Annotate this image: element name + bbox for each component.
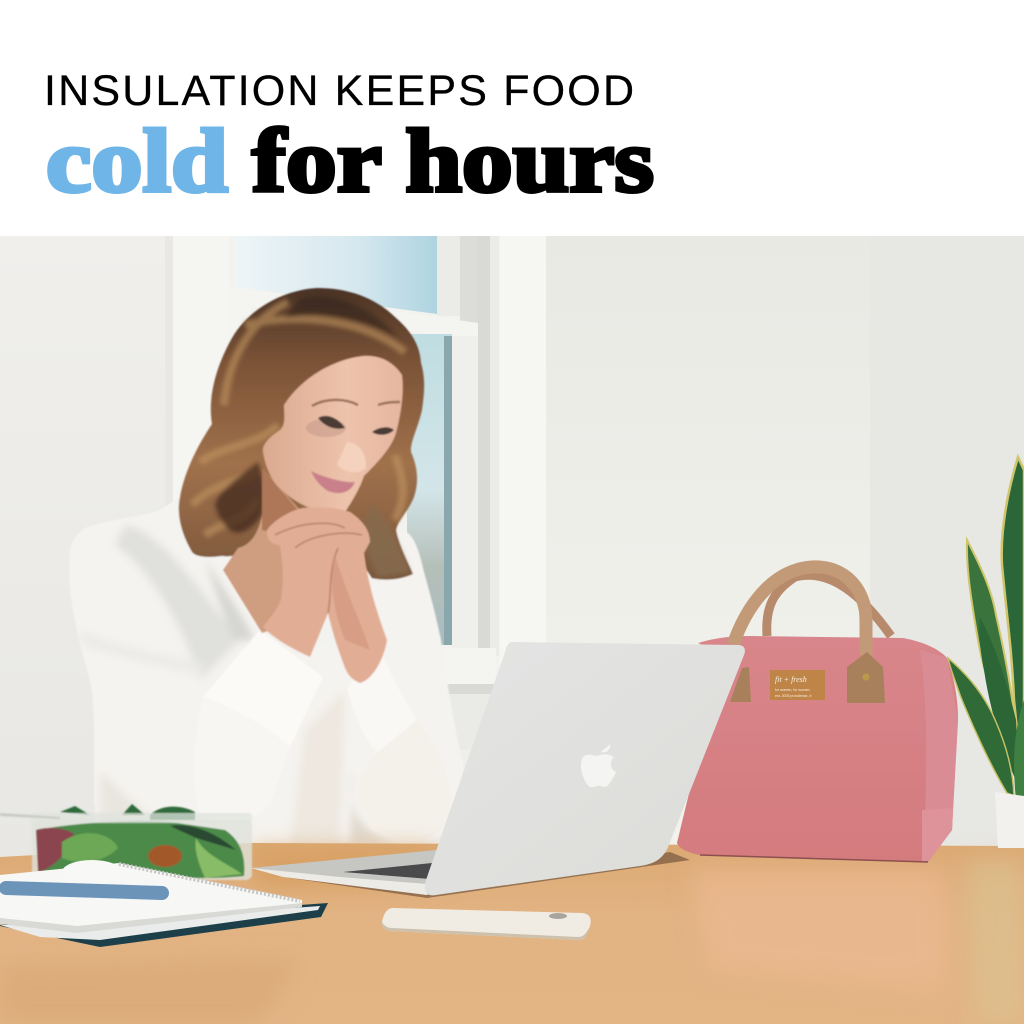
notebook cover [0,903,328,947]
window sill [436,648,496,684]
title line: insulation keeps food: INSULATION KEEPS FOOD [44,67,634,115]
table reflections and grain [0,850,1024,1024]
bag back handle [767,575,891,636]
blouse [69,497,463,845]
blouse shoulder shadow folds [80,525,450,845]
plant leaf: inner [979,617,1020,790]
laptop lid [425,642,745,895]
title [44,67,654,211]
bag label: fit + fresh [775,675,807,684]
mouse [62,860,122,884]
title words: for hours: for hours [252,112,654,211]
bag body [677,636,958,862]
bag handle tab: left [730,667,751,702]
pen [6,888,162,893]
salad container [0,804,252,880]
phone [382,908,591,940]
photo: woman [69,288,463,845]
face [263,356,403,514]
plant leaf: tall right [1002,457,1024,800]
lunch bag [677,567,958,862]
plant [948,457,1024,848]
bag side panel [920,650,958,862]
plant pot [995,792,1024,848]
plant leaf: front low [948,658,1014,796]
hands and forearms [263,507,387,683]
eyes, brows, nose and mouth [306,400,400,493]
bag label: for women, for women [775,688,810,692]
laptop keyboard [343,863,432,879]
notebook pages [0,863,302,932]
photo: room walls [0,236,1024,860]
laptop [251,642,745,898]
salad container rim [30,813,252,823]
laptop base [251,850,450,895]
blouse cuffs [203,630,323,747]
hair [179,288,424,580]
plant leaf: middle [967,540,1016,760]
apple logo [581,744,616,787]
window lower glass [407,334,452,645]
bag handle tab: right [847,652,885,703]
notebook and pen [0,860,328,947]
title word: cold: cold [46,112,228,211]
photo: table [0,843,1024,1024]
photo: window [228,236,500,750]
bag front handle [733,567,866,655]
bag label [770,670,825,700]
notebook spiral [119,864,300,901]
hair highlights and shadows [192,296,410,577]
window upper glass [235,236,437,314]
bag label: est. 2005 providence, ri [775,694,812,698]
background: white header band [0,0,1024,236]
window sash rail [228,286,478,400]
neck and chest [223,468,325,633]
laptop shadow [283,852,690,898]
salad greens [36,821,244,878]
